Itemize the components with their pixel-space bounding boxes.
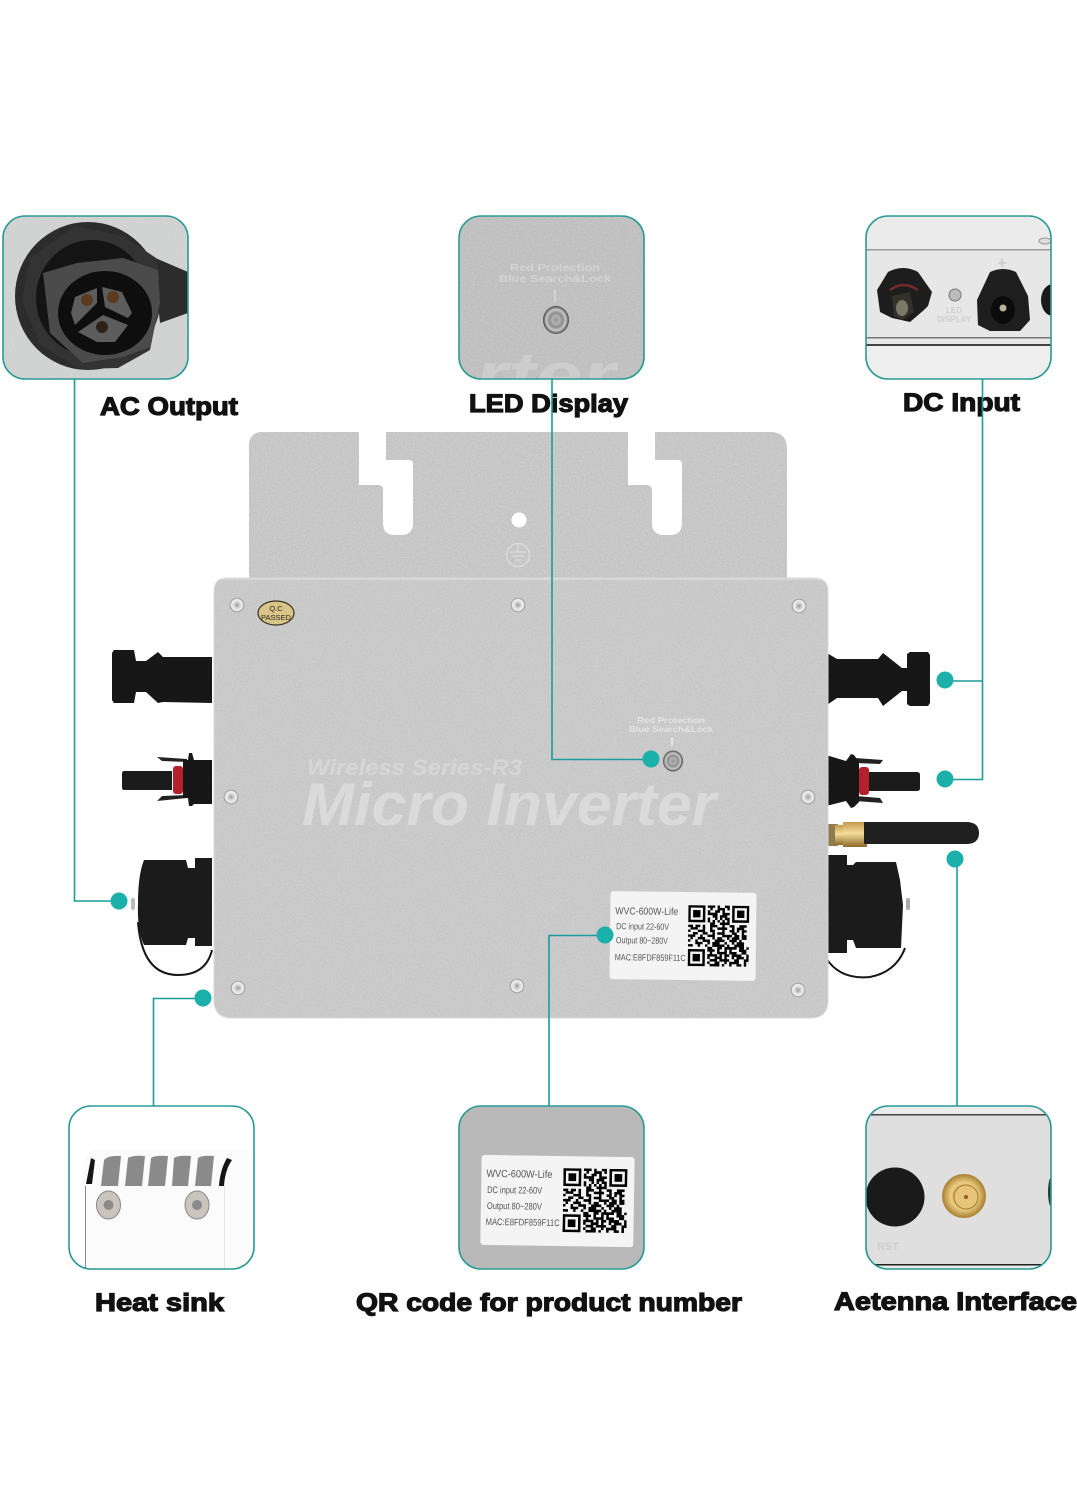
- right MC4 connector: [827, 652, 930, 706]
- panel: LED display detail: Red Protection: [510, 262, 600, 274]
- panel: LED display detail: [458, 215, 645, 380]
- arrow: QR code leader: [549, 926, 614, 1106]
- product label sticker: Output 80~280V: [616, 935, 668, 946]
- arrow: DC input leader: [936, 379, 982, 788]
- heading: DC Input: DC Input: [903, 389, 1021, 417]
- arrow: AC output leader: [74, 379, 128, 910]
- left MC4 connector: [112, 650, 212, 703]
- arrow: LED display leader: [552, 379, 660, 768]
- panel: antenna interface detail: [866, 1106, 1056, 1270]
- inverter product photo: [112, 432, 979, 1019]
- main housing: [213, 578, 829, 1019]
- right DC pin connector: [826, 754, 920, 808]
- panel: antenna interface detail: RST: [877, 1241, 899, 1253]
- panel: QR code detail: Output 80~280V: [487, 1201, 542, 1213]
- arrow: antenna leader: [946, 850, 964, 1106]
- panel: DC input detail: [866, 216, 1065, 379]
- panel: QR code detail: DC input 22-60V: [487, 1185, 543, 1197]
- panel: DC input detail: +: [997, 255, 1007, 272]
- left DC pin connector: [122, 753, 212, 806]
- QC passed seal: PASSED: [261, 613, 292, 622]
- wireless series print: Wireless Series-R3: [307, 755, 522, 780]
- panel: heat sink detail: [69, 1106, 254, 1269]
- LED notes: Red Protection: [637, 715, 705, 725]
- panel: LED display detail: Blue Search&Lock: [499, 273, 611, 285]
- housing screws: [224, 598, 815, 997]
- panel: AC output detail: [3, 216, 188, 379]
- heading: Aetenna Interface: Aetenna Interface: [834, 1288, 1077, 1316]
- heading: LED Display: LED Display: [469, 390, 628, 418]
- product label sticker: MAC:E8FDF859F11C: [615, 952, 686, 963]
- product label sticker: WVC-600W-Life: [615, 906, 679, 918]
- panel: LED display detail: rter: [475, 338, 619, 414]
- micro inverter print: Micro Inverter: [302, 771, 720, 838]
- QC passed seal: Q.C: [269, 604, 283, 613]
- panel: DC input detail: DISPLAY: [937, 315, 972, 324]
- QC passed seal: [258, 601, 294, 625]
- right AC gland: [826, 855, 910, 977]
- right antenna: [826, 822, 979, 847]
- product label sticker: [609, 891, 757, 981]
- mounting bracket: [249, 432, 787, 580]
- left AC gland: [131, 858, 212, 975]
- product label sticker: DC input 22-60V: [616, 921, 669, 932]
- heading: QR code for product number: QR code for product number: [356, 1289, 742, 1317]
- panel: DC input detail: LED: [946, 306, 962, 315]
- panel: QR code detail: [459, 1106, 644, 1269]
- LED notes: Blue Search&Lock: [629, 724, 713, 734]
- panel: QR code detail: MAC:E8FDF859F11C: [486, 1217, 560, 1229]
- LED button: [663, 750, 683, 772]
- arrow: heat sink leader: [154, 990, 212, 1106]
- LED notes: [629, 715, 713, 746]
- heading: AC Output: AC Output: [100, 393, 239, 421]
- panel: QR code detail: WVC-600W-Life: [486, 1168, 553, 1181]
- heading: Heat sink: Heat sink: [95, 1289, 224, 1317]
